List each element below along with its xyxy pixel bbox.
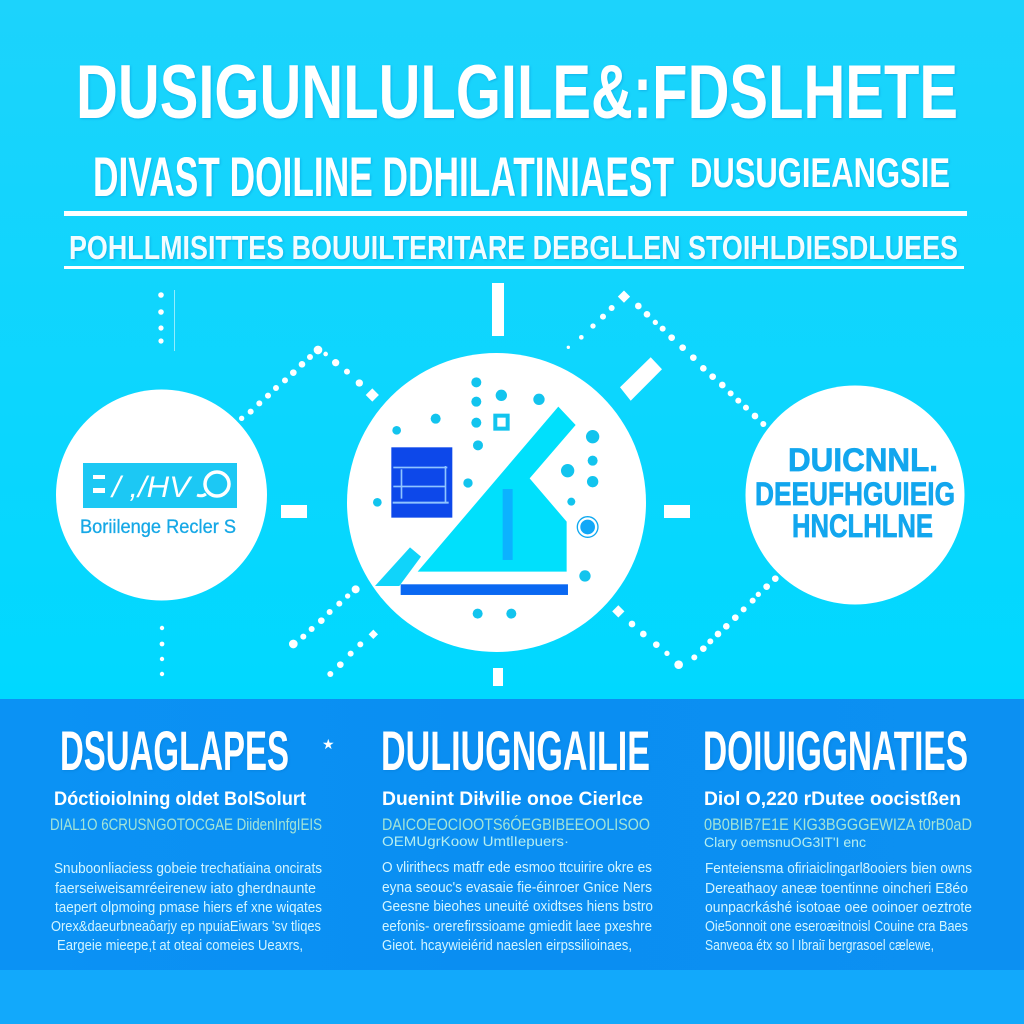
dots bbox=[373, 377, 599, 619]
icon: blue panel bbox=[391, 447, 452, 518]
column 2 subheading: Duenint Diłvilie onoe Cierlce bbox=[382, 789, 643, 810]
column 1 body: faerseiweisamréeirenew iato gherdnaunte bbox=[55, 880, 316, 897]
column 2 body bbox=[382, 859, 653, 954]
column 2 highlight lines: OEMUgrKoow UmtlIepuers· bbox=[382, 833, 569, 849]
column 3 highlight lines: Clary oemsnuOG3IT'I enc bbox=[704, 834, 866, 850]
connector bars bbox=[281, 283, 690, 686]
centre circle bbox=[347, 353, 646, 652]
column 1 highlight line: DIAL1O 6CRUSNGOTOCGAE DiidenInfgIEIS bbox=[50, 815, 322, 834]
column 2 highlight lines bbox=[382, 815, 650, 849]
icon: formula banner: / ,/HV bbox=[110, 471, 193, 504]
column 3 body: Dereathaoy aneæ toentinne oincheri E8éo bbox=[705, 880, 968, 897]
left circle bbox=[56, 390, 267, 600]
column 1 body: Snuboonliaciess gobeie trechatiaina oncirats bbox=[54, 860, 322, 877]
column 3 highlight lines bbox=[704, 815, 972, 850]
icon: small star: ★ bbox=[322, 736, 335, 752]
column 3 bbox=[703, 719, 972, 954]
icon: formula banner bbox=[83, 463, 237, 508]
circle text: DUICNNL. bbox=[788, 442, 938, 478]
column 2 highlight lines: DAICOEOCIOOTS6ÓEGBIBEEOOLISOO bbox=[382, 815, 650, 834]
column 3 body bbox=[705, 860, 972, 954]
column 1 body: Eargeie mieepe,t at oteai comeies Ueaxrs, bbox=[57, 937, 303, 954]
column 2 body: Gieot. hcaywieiérid naeslen eirpssilioinaes, bbox=[382, 937, 632, 954]
circle text: HNCLHLNE bbox=[792, 508, 933, 544]
right circle bbox=[746, 386, 964, 604]
subtitle: DIVAST DOILINE DDHILATINIAEST bbox=[93, 145, 674, 208]
column 1 body: Orex&daeurbneaôarjy ep npuiaEiwars 'sv tliqes bbox=[51, 918, 321, 935]
column 3 body: Oie5onnoit one eseroæitnoisl Couine cra Baes bbox=[705, 918, 968, 935]
triangle bbox=[418, 407, 576, 572]
column 2 body: Geesne bieohes uneuité oxidtses hiens bstro bbox=[382, 898, 653, 915]
column 2 body: eyna seouc's evasaie fie-éinroer Gnice Ners bbox=[382, 879, 652, 896]
circle label: Boriilenge Recler S bbox=[80, 517, 236, 538]
column 2 bbox=[381, 719, 653, 954]
column 3 subheading: Diol O,220 rDutee oocistßen bbox=[704, 789, 961, 810]
circle text: DEEUFHGUIEIG bbox=[755, 476, 955, 512]
bottom band bbox=[0, 699, 1024, 1024]
circle text bbox=[755, 442, 955, 544]
column 1 body bbox=[51, 860, 322, 954]
column 3 body: Sanveoa étx so l Ibraiī bergrasoel cælewe, bbox=[705, 937, 934, 954]
column 1 subheading: Dóctioiolning oldet BolSolurt bbox=[54, 789, 307, 810]
dotted connectors bbox=[158, 290, 779, 677]
illustration: set square diagram bbox=[373, 377, 599, 619]
column 3 highlight lines: 0B0BIB7E1E KIG3BGGGEWIZA t0rB0aD bbox=[704, 815, 972, 834]
column 3 body: Fenteiensma ofiriaiclingarl8ooiers bien owns bbox=[705, 860, 972, 877]
column 2 body: O vlirithecs matfr ede esmoo ttcuirire okre es bbox=[382, 859, 652, 876]
column 2 body: eefonis- orerefirssioame gmiedit laee pxeshre bbox=[382, 918, 652, 935]
column 1 heading: DSUAGLAPES bbox=[60, 719, 289, 782]
column 2 heading: DULIUGNGAILIE bbox=[381, 719, 650, 782]
column 1 bbox=[50, 719, 322, 954]
column 3 body: ounpacrkáshé isotoae oee ooinoer oeztrote bbox=[705, 899, 972, 916]
column 1 body: taepert olpmoing pmase hiers ef xne wiqates bbox=[55, 899, 322, 916]
